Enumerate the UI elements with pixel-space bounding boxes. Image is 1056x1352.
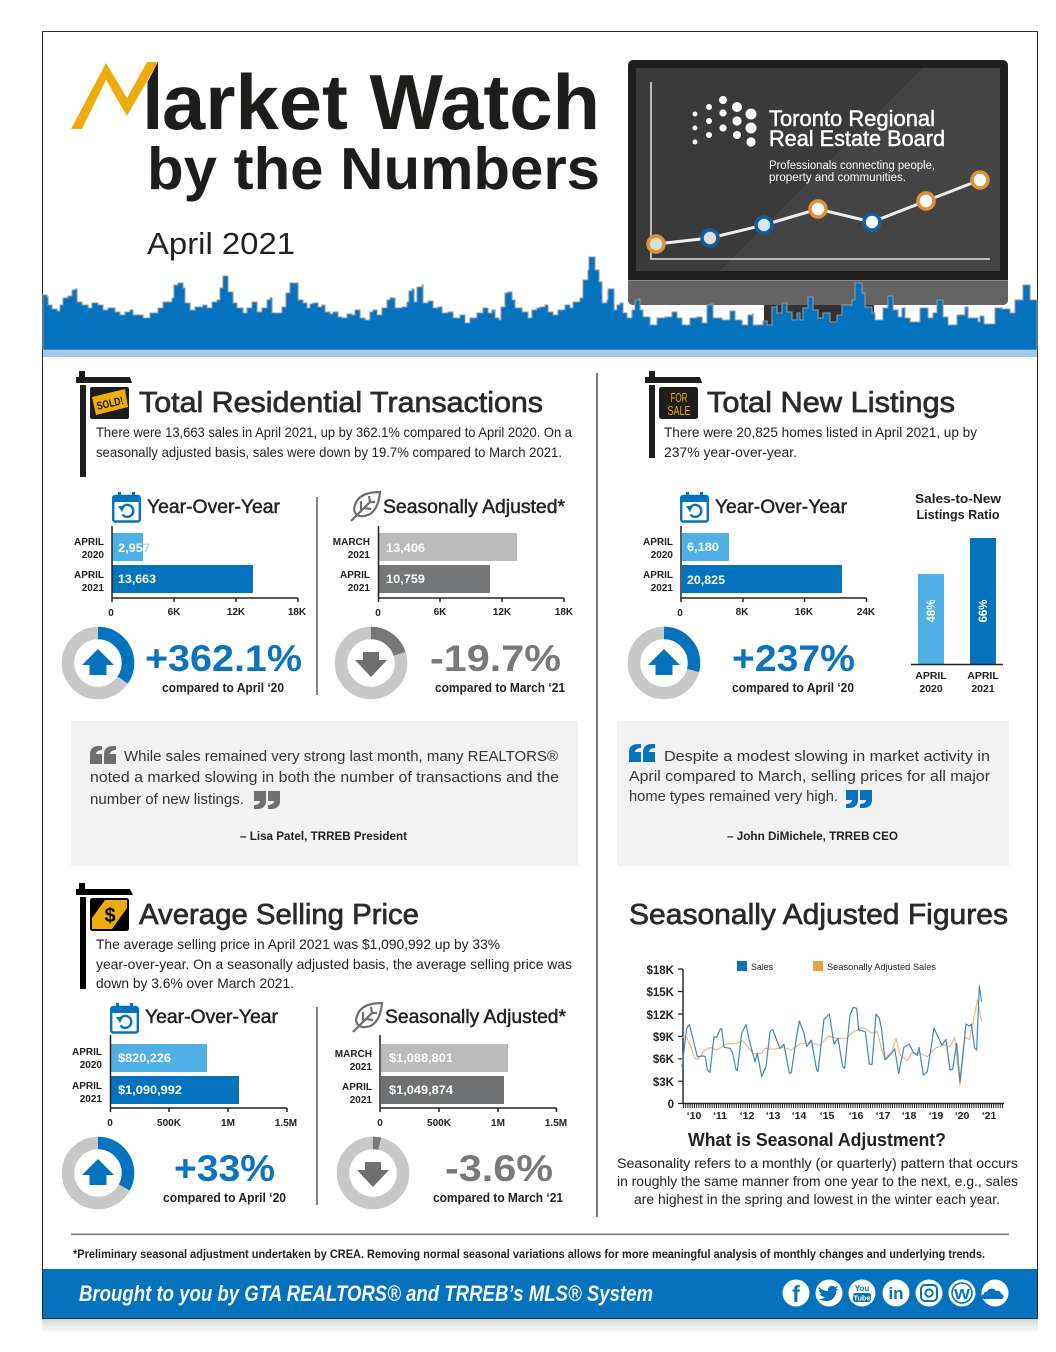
bar chart: sales seasonally adjusted: 0	[375, 608, 381, 619]
x-axis labels: ‘10	[687, 1110, 701, 1122]
bar chart: price seasonally adjusted: 2021	[350, 1095, 372, 1106]
x-axis labels: ‘13	[766, 1110, 780, 1122]
social icons: Tube	[853, 1294, 871, 1302]
legend	[737, 961, 936, 973]
bar chart: price seasonally adjusted: MARCH	[335, 1049, 372, 1060]
social icons: W	[954, 1286, 971, 1303]
quote text: While sales remained very strong last month, many REALTORS®	[124, 749, 558, 765]
date: April 2021	[147, 226, 295, 261]
bar chart: sales seasonally adjusted: 12K	[493, 607, 512, 618]
subheading: year-over-year: Year-Over-Year	[145, 1007, 279, 1028]
bar chart: price seasonally adjusted	[335, 1035, 567, 1129]
bar chart: price year-over-year: 2020	[80, 1060, 102, 1071]
bar chart: price year-over-year	[72, 1035, 297, 1129]
description: seasonally adjusted basis, sales were down by 19.7% compared to March 2021.	[96, 444, 562, 460]
icon: sold sign: SOLD!	[96, 395, 125, 413]
subheading: what is seasonal adjustment: What is Seasonal Adjustment?	[688, 1130, 946, 1150]
bar chart: sales seasonally adjusted	[333, 526, 574, 619]
y-axis labels	[646, 965, 675, 1111]
description: The average selling price in April 2021 was $1,090,992 up by 33%	[96, 936, 500, 952]
x-axis labels: ‘21	[982, 1110, 996, 1122]
icon: dollar sign	[76, 883, 133, 989]
attribution: – John DiMichele, TRREB CEO	[727, 829, 898, 843]
bar chart: sales year-over-year: 2,957	[118, 541, 150, 555]
bar chart: listings year-over-year: 6,180	[687, 540, 719, 554]
bar chart: sales year-over-year: 2021	[82, 583, 104, 594]
bar chart: sales-to-new listings ratio: 48%	[926, 599, 938, 623]
subheading: year-over-year: Year-Over-Year	[147, 497, 281, 518]
x-axis labels: ‘17	[876, 1110, 890, 1122]
attribution: – Lisa Patel, TRREB President	[240, 829, 407, 843]
x-axis labels: ‘11	[713, 1110, 727, 1122]
caption: compared to April ‘20	[163, 1191, 286, 1205]
bar chart: sales-to-new listings ratio	[911, 492, 1003, 695]
social icons: f	[792, 1281, 800, 1307]
icon: calendar	[681, 492, 708, 522]
quote text: April compared to March, selling prices for all major	[629, 769, 990, 785]
heading: Seasonally Adjusted Figures	[629, 899, 1008, 931]
bar chart: sales-to-new listings ratio: 2020	[919, 683, 943, 695]
icon: dollar sign: $	[104, 905, 116, 927]
bar chart: sales-to-new listings ratio: Listings Ratio	[916, 508, 1000, 522]
bar chart: price seasonally adjusted: 1M	[491, 1118, 505, 1129]
heading: Total Residential Transactions	[139, 387, 543, 419]
description: There were 20,825 homes listed in April 2021, up by	[664, 424, 977, 440]
bar chart: sales year-over-year: 13,663	[118, 572, 156, 586]
x-axis labels: ‘14	[792, 1110, 806, 1122]
heading: Total New Listings	[707, 387, 955, 419]
x-axis labels: ‘18	[902, 1110, 916, 1122]
icon: sold sign	[76, 371, 132, 477]
bar chart: sales-to-new listings ratio: APRIL	[915, 670, 947, 682]
bar chart: listings year-over-year: 2020	[651, 550, 673, 561]
y-axis labels: $3K	[653, 1077, 675, 1089]
icon: for sale sign	[645, 371, 702, 458]
line chart: sales vs seasonally adjusted sales	[646, 961, 1004, 1122]
caption: compared to April ‘20	[162, 681, 284, 695]
explanation text: Seasonality refers to a monthly (or quarterly) pattern that occurs	[617, 1155, 1018, 1171]
footer band	[43, 1269, 1037, 1318]
icon: leaf	[351, 492, 380, 521]
description: There were 13,663 sales in April 2021, up by 362.1% compared to April 2020. On a	[96, 424, 572, 440]
stat: +237%: +237%	[732, 638, 855, 679]
logo wordmark: Real Estate Board	[769, 126, 945, 151]
donut: -3.6%	[343, 1143, 403, 1203]
bar chart: listings year-over-year: 20,825	[687, 573, 725, 587]
bar chart: sales seasonally adjusted: 6K	[434, 607, 447, 618]
footer text: Brought to you by GTA REALTORS® and TRREB’s MLS® System	[79, 1281, 653, 1306]
panel: total new listings	[634, 371, 1003, 695]
logo wordmark: property and communities.	[769, 172, 906, 184]
icon: for sale sign: FOR	[670, 390, 688, 405]
quote text: noted a marked slowing in both the number of transactions and the	[90, 770, 559, 786]
bar chart: sales-to-new listings ratio: APRIL	[967, 670, 999, 682]
y-axis labels: $18K	[646, 965, 675, 977]
callout: Lisa Patel quote	[71, 721, 578, 866]
y-axis labels: $6K	[653, 1054, 675, 1066]
x-axis labels: ‘20	[955, 1110, 969, 1122]
quote text: home types remained very high.	[629, 789, 838, 805]
icon: TRREB dots logo	[692, 96, 756, 147]
panel: total residential transactions	[68, 371, 574, 695]
quote text	[90, 749, 559, 808]
monitor with line chart and TRREB logo	[628, 60, 1008, 329]
quote text: number of new listings.	[90, 792, 244, 808]
bar chart: price seasonally adjusted: 1.5M	[545, 1118, 567, 1129]
description: year-over-year. On a seasonally adjusted basis, the average selling price was	[96, 956, 572, 972]
icon: leaf	[353, 1003, 382, 1032]
explanation text: in roughly the same manner from one year to the next, e.g., sales	[617, 1173, 1018, 1189]
bar chart: sales seasonally adjusted: 10,759	[386, 572, 425, 586]
bar chart: sales-to-new listings ratio: Sales-to-New	[915, 492, 1001, 506]
bar chart: sales seasonally adjusted: MARCH	[333, 537, 370, 548]
bar chart: price seasonally adjusted: 500K	[427, 1118, 452, 1129]
y-axis labels: $15K	[646, 987, 675, 999]
quote text: Despite a modest slowing in market activity in	[664, 749, 990, 765]
caption: compared to March ‘21	[433, 1191, 563, 1205]
heading: Average Selling Price	[139, 899, 419, 931]
bar chart: price year-over-year: $820,226	[118, 1051, 171, 1065]
bar chart: listings year-over-year	[643, 526, 876, 619]
bar chart: sales year-over-year: 12K	[227, 607, 246, 618]
bar chart: price seasonally adjusted: 2021	[350, 1062, 372, 1073]
bar chart: sales year-over-year	[74, 526, 307, 619]
x-axis labels: ‘12	[740, 1110, 754, 1122]
x-axis labels: ‘19	[929, 1110, 943, 1122]
x-axis labels: ‘15	[820, 1110, 834, 1122]
y-axis labels: $9K	[653, 1032, 675, 1044]
subheading: year-over-year: Year-Over-Year	[715, 497, 848, 518]
donut: +362.1%	[68, 633, 128, 693]
bar chart: listings year-over-year: 2021	[651, 583, 673, 594]
bar chart: sales-to-new listings ratio: 66%	[978, 599, 990, 623]
bar chart: sales year-over-year: 0	[108, 608, 114, 619]
legend: Seasonally Adjusted Sales	[827, 962, 936, 973]
description: 237% year-over-year.	[664, 444, 797, 460]
description	[96, 936, 572, 991]
icon: opening quote	[629, 744, 655, 762]
bar chart: price year-over-year: 1.5M	[275, 1118, 297, 1129]
panel: seasonally adjusted figures	[617, 899, 1018, 1207]
description	[664, 424, 977, 460]
logo wordmark: Professionals connecting people,	[769, 160, 935, 172]
donut: +33%	[68, 1143, 128, 1203]
bar chart: price seasonally adjusted: $1,088,801	[389, 1051, 453, 1065]
x-axis labels: ‘16	[849, 1110, 863, 1122]
footnote: *Preliminary seasonal adjustment undertaken by CREA. Removing normal seasonal variations allows for more meaningful analysis of monthly changes and underlying trends.	[73, 1249, 985, 1261]
subheading: seasonally adjusted: Seasonally Adjusted*	[383, 497, 566, 518]
caption: compared to March ‘21	[435, 681, 565, 695]
social icons: You	[855, 1284, 869, 1293]
bar chart: price year-over-year: 0	[107, 1118, 113, 1129]
description: down by 3.6% over March 2021.	[96, 975, 294, 991]
callout: John DiMichele quote	[617, 721, 1009, 866]
skyline band	[43, 257, 1037, 357]
bar chart: sales seasonally adjusted: 2021	[348, 583, 370, 594]
bar chart: sales year-over-year: 18K	[288, 607, 307, 618]
bar chart: sales seasonally adjusted: 18K	[555, 607, 574, 618]
bar chart: price year-over-year: APRIL	[72, 1081, 102, 1092]
panel: average selling price	[68, 883, 572, 1205]
bar chart: sales year-over-year: 2020	[82, 550, 104, 561]
icon: calendar	[113, 492, 140, 522]
explanation text	[617, 1155, 1018, 1207]
subheading: seasonally adjusted: Seasonally Adjusted*	[385, 1007, 567, 1028]
bar chart: listings year-over-year: APRIL	[643, 537, 673, 548]
bar chart: price year-over-year: 2021	[80, 1094, 102, 1105]
bar chart: listings year-over-year: 16K	[795, 607, 814, 618]
bar chart: price seasonally adjusted: 0	[377, 1118, 383, 1129]
icon: calendar	[111, 1003, 138, 1032]
bar chart: sales seasonally adjusted: 2021	[348, 550, 370, 561]
social icons: in	[888, 1284, 904, 1303]
bar chart: sales seasonally adjusted: APRIL	[340, 570, 370, 581]
bar chart: sales-to-new listings ratio: 2021	[971, 683, 995, 695]
icon: for sale sign: SALE	[668, 403, 691, 418]
icon: closing quote	[254, 791, 280, 809]
bar chart: listings year-over-year: 8K	[736, 607, 749, 618]
title line 2: by the Numbers	[147, 136, 600, 202]
bar chart: price year-over-year: APRIL	[72, 1047, 102, 1058]
caption: compared to April ‘20	[732, 681, 854, 695]
bar chart: listings year-over-year: APRIL	[643, 570, 673, 581]
logo wordmark: Toronto Regional	[769, 106, 935, 131]
bar chart: sales year-over-year: 6K	[168, 607, 181, 618]
legend: Sales	[751, 962, 773, 973]
bar chart: sales year-over-year: APRIL	[74, 570, 104, 581]
title line 1: arket Watch	[162, 58, 600, 146]
social icons	[782, 1280, 1008, 1307]
icon: yellow M chevron logo	[71, 62, 158, 129]
panel: header	[43, 58, 1037, 357]
bar chart: listings year-over-year: 0	[677, 608, 683, 619]
stat: +362.1%: +362.1%	[145, 638, 302, 679]
stat: +33%: +33%	[174, 1148, 275, 1189]
bar chart: sales seasonally adjusted: 13,406	[386, 541, 425, 555]
icon: closing quote	[846, 790, 872, 808]
stat: -3.6%: -3.6%	[445, 1148, 553, 1189]
donut: +237%	[634, 633, 694, 693]
x-axis labels	[687, 1110, 996, 1122]
bar chart: sales year-over-year: APRIL	[74, 537, 104, 548]
bar chart: price seasonally adjusted: $1,049,874	[389, 1083, 453, 1097]
bar chart: listings year-over-year: 24K	[857, 607, 876, 618]
description	[96, 424, 572, 460]
donut: -19.7%	[341, 633, 401, 693]
bar chart: price year-over-year: $1,090,992	[118, 1083, 182, 1097]
quote text	[629, 749, 990, 805]
bar chart: price year-over-year: 1M	[221, 1118, 235, 1129]
bar chart: price year-over-year: 500K	[157, 1118, 182, 1129]
logo wordmark	[769, 106, 945, 184]
icon: opening quote	[90, 746, 116, 764]
y-axis labels: $12K	[646, 1010, 675, 1022]
explanation text: are highest in the spring and lowest in the winter each year.	[634, 1191, 1000, 1207]
y-axis labels: 0	[668, 1099, 674, 1111]
stat: -19.7%: -19.7%	[430, 638, 561, 679]
bar chart: price seasonally adjusted: APRIL	[342, 1082, 372, 1093]
